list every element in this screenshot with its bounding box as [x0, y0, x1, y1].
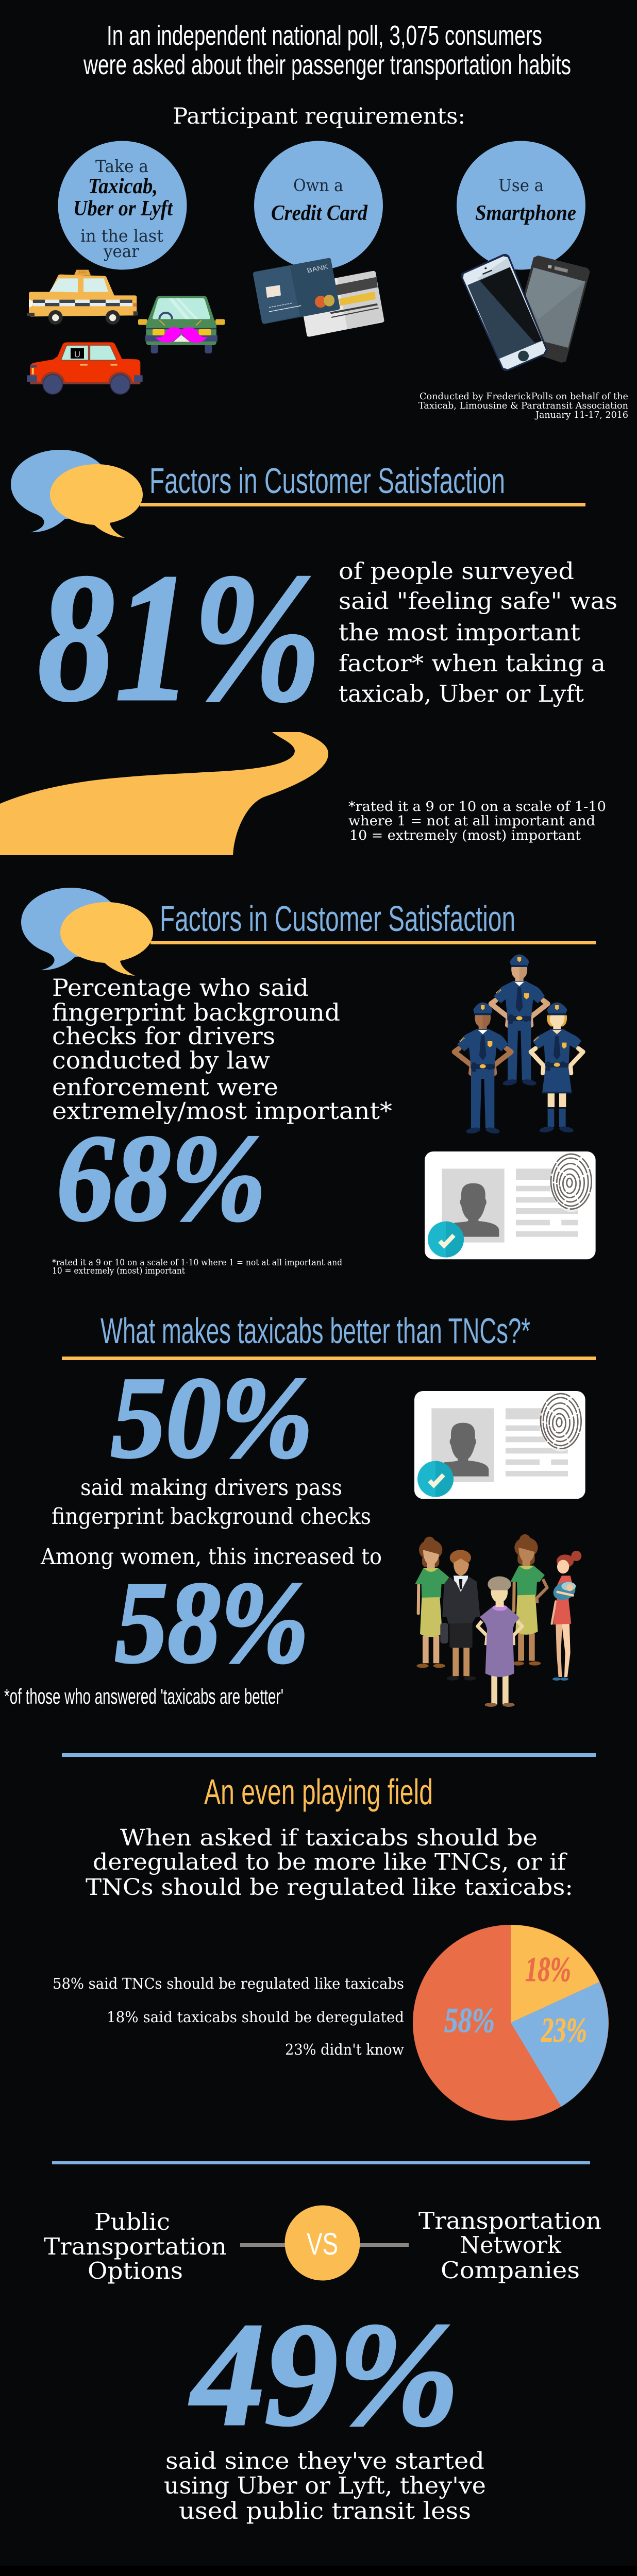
text: feeling safe	[339, 557, 617, 707]
text: regulation question: When asked if taxicabs should be	[120, 1825, 538, 1851]
credit line: survey conducted by: Conducted by FrederickPolls on behalf of the	[420, 391, 628, 402]
pie chart	[413, 1925, 609, 2121]
footnote: rating scale: where 1 = not at all important and	[348, 814, 595, 829]
icon: fingerprint id card	[425, 1151, 596, 1259]
text: feeling safe: factor* when taking a	[339, 650, 606, 677]
text: feeling safe: taxicab, Uber or Lyft	[339, 680, 584, 707]
heading: participant requirements: Participant requirements:	[173, 104, 465, 129]
pie chart: 18%	[525, 1950, 571, 1989]
icon: lyft car with moustache	[138, 296, 225, 353]
footnote: rating scale	[52, 1258, 342, 1276]
figure: woman in suit	[440, 1550, 480, 1681]
footnote: rating scale: 10 = extremely (most) important	[349, 828, 581, 843]
title	[83, 20, 571, 80]
text: fingerprint checks	[52, 1475, 371, 1530]
text: public transportation options	[44, 2208, 227, 2284]
icon: credit cards: BANK	[306, 264, 329, 275]
icon: policewoman	[531, 1003, 583, 1133]
requirement circle: ride: Taxicab,	[88, 175, 158, 198]
footnote: those who answered: *of those who answered 'taxicabs are better'	[4, 1684, 283, 1708]
text: public transit less	[164, 2447, 486, 2524]
footnote: rating scale: *rated it a 9 or 10 on a scale of 1-10	[348, 799, 606, 815]
footnote: rating scale: 10 = extremely (most) important	[52, 1266, 185, 1276]
text: public transit less: used public transit less	[179, 2497, 471, 2524]
pie chart: 23%	[541, 2010, 587, 2049]
footnote: rating scale: *rated it a 9 or 10 on a scale of 1-10 where 1 = not at all important and	[52, 1258, 342, 1267]
text: fingerprint checks: said making drivers pass	[80, 1475, 342, 1501]
divider rule	[62, 1753, 596, 1757]
icon: credit cards	[253, 258, 384, 337]
legend: pie labels: 18% said taxicabs should be deregulated	[107, 2008, 404, 2026]
icon: fingerprint id card	[414, 1391, 585, 1499]
text: public transportation options: Options	[88, 2257, 183, 2284]
legend: pie labels: 58% said TNCs should be regulated like taxicabs	[53, 1975, 404, 1992]
text: feeling safe: the most important	[339, 619, 580, 646]
stat: 81%: 81%	[38, 536, 321, 739]
text: fingerprint checks question: fingerprint background	[52, 998, 340, 1026]
stat: 68%: 68%	[57, 1109, 266, 1246]
icon: group of women	[415, 1534, 581, 1707]
icon: smartphones	[461, 254, 590, 371]
text: regulation question: deregulated to be more like TNCs, or if	[93, 1849, 567, 1875]
requirement circle: credit card: Credit Card	[271, 201, 368, 225]
text: fingerprint checks: fingerprint background checks	[52, 1504, 371, 1530]
text: fingerprint checks question: conducted by law	[52, 1046, 270, 1074]
footnote: rating scale	[348, 799, 606, 843]
text: transportation network companies	[418, 2207, 601, 2284]
requirement circle: ride: year	[103, 241, 139, 261]
requirement circle: ride	[58, 141, 187, 270]
text: transportation network companies: Transportation	[418, 2207, 601, 2234]
credit line: survey conducted by: January 11-17, 2016	[534, 410, 628, 420]
text: fingerprint checks question: Percentage who said	[52, 974, 309, 1002]
text: regulation question: TNCs should be regulated like taxicabs:	[86, 1874, 573, 1901]
decorative orange swoosh	[0, 732, 328, 855]
vs badge	[240, 2205, 409, 2280]
stat: 50%: 50%	[111, 1353, 313, 1482]
text: regulation question	[86, 1825, 573, 1901]
requirement circle: ride: in the last	[80, 226, 163, 246]
text: public transit less: using Uber or Lyft, they've	[164, 2472, 486, 2499]
credit line: survey conducted by: Taxicab, Limousine & Paratransit Association	[418, 400, 628, 411]
divider rule	[52, 2161, 590, 2164]
text: feeling safe: of people surveyed	[339, 557, 574, 585]
pie chart: 58%	[444, 2001, 495, 2040]
icon: uber car: U	[74, 349, 80, 359]
text: public transit less: said since they've started	[165, 2447, 484, 2475]
text: among women: Among women, this increased to	[40, 1544, 382, 1570]
text: public transportation options: Transportation	[44, 2233, 227, 2260]
text: fingerprint checks question	[52, 974, 392, 1125]
stat: 58%: 58%	[115, 1558, 309, 1687]
figure: woman with baby	[551, 1551, 581, 1681]
credit line: survey conducted by	[418, 391, 628, 420]
requirement circle: smartphone: Smartphone	[475, 201, 576, 225]
requirement circle: smartphone	[457, 141, 585, 270]
text: transportation network companies: Network	[460, 2231, 562, 2259]
requirement circle: credit card: Own a	[293, 175, 343, 195]
requirement circle: smartphone: Use a	[498, 175, 544, 195]
text: feeling safe: said "feeling safe" was	[339, 587, 617, 615]
icon: police officers	[455, 954, 583, 1134]
requirement circle: ride: Take a	[95, 156, 148, 176]
figure: older woman in purple dress	[478, 1577, 522, 1707]
vs badge: VS	[307, 2227, 338, 2261]
text: fingerprint checks question: enforcement were	[52, 1073, 278, 1101]
text: fingerprint checks question: extremely/most important*	[52, 1097, 392, 1125]
legend: pie labels: 23% didn't know	[285, 2041, 404, 2058]
text: fingerprint checks question: checks for drivers	[52, 1022, 275, 1050]
icon: speech bubbles	[11, 450, 143, 538]
icon: taxi: TAXI	[78, 270, 87, 275]
legend: pie labels	[53, 1975, 404, 2058]
text: transportation network companies: Companies	[441, 2257, 580, 2284]
requirement circle: credit card	[254, 141, 383, 270]
stat: 49%: 49%	[190, 2293, 459, 2456]
requirement circle: ride: Uber or Lyft	[73, 197, 173, 221]
icon: speech bubbles	[21, 888, 153, 976]
icon: taxi	[27, 270, 138, 325]
heading: an even playing field: An even playing field	[204, 1772, 433, 1812]
text: public transportation options: Public	[94, 2208, 170, 2235]
icon: uber car	[27, 342, 143, 394]
